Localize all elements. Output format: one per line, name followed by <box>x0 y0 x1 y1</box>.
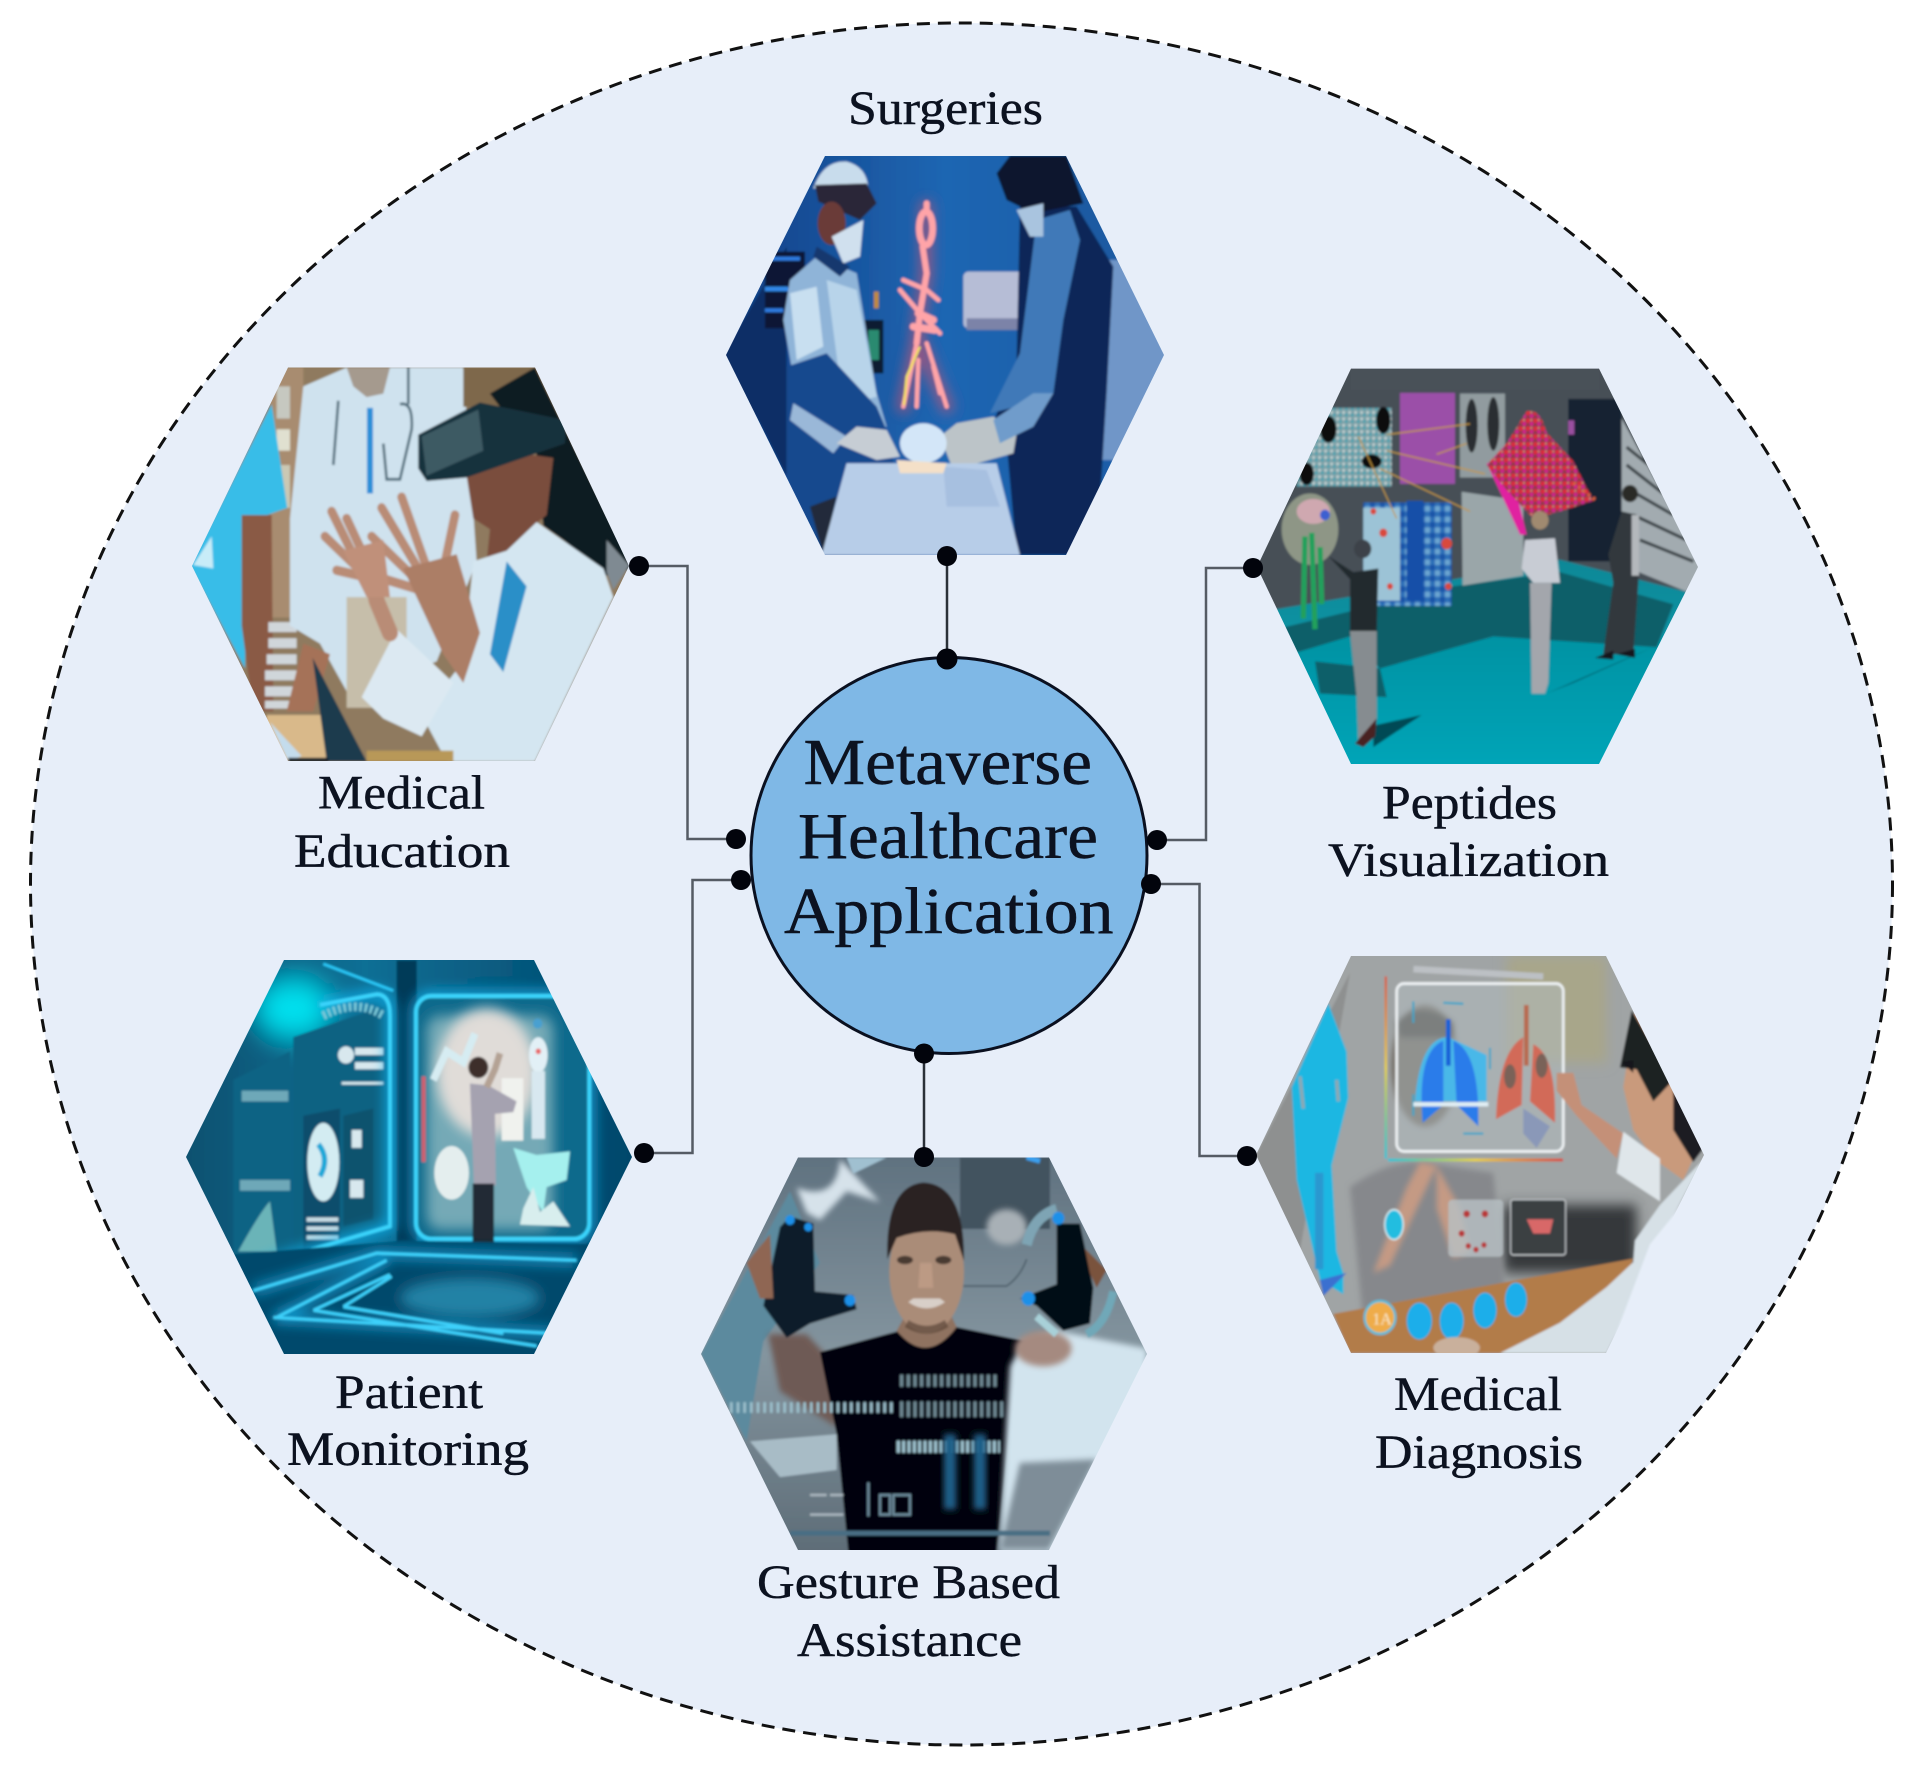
label: Patient Monitoring <box>287 1366 529 1476</box>
label: Medical Education <box>294 766 510 878</box>
label: Peptides Visualization: Peptides <box>1382 776 1557 830</box>
hexagon image: patient monitoring hologram room <box>183 955 637 1359</box>
hexagon image: peptides visualization room <box>1253 365 1703 769</box>
connector: patient monitoring to centre <box>644 880 741 1153</box>
hexagon image: medical diagnosis with lungs <box>1253 951 1710 1359</box>
label: Peptides Visualization <box>1328 776 1609 887</box>
centre title: Healthcare <box>798 800 1098 873</box>
centre title: Metaverse <box>804 726 1092 799</box>
connector: medical diagnosis to centre <box>1151 884 1247 1156</box>
label: Medical Education: Education <box>294 825 510 878</box>
connector end dots <box>629 546 1263 1167</box>
hexagon image: medical diagnosis with lungs: 1A <box>1372 1309 1392 1329</box>
connector: surgeries to centre <box>946 556 948 659</box>
label: Peptides Visualization: Visualization <box>1328 834 1609 887</box>
hexagon image: doctor wearing VR headset <box>187 361 633 769</box>
label: Gesture Based Assistance <box>757 1556 1060 1667</box>
connector: medical education to centre <box>639 566 736 839</box>
connector: gesture based assistance to centre <box>923 1053 925 1157</box>
label: Gesture Based Assistance: Gesture Based <box>757 1556 1060 1609</box>
label: Patient Monitoring: Patient <box>335 1366 484 1419</box>
label: Medical Diagnosis <box>1375 1368 1583 1479</box>
central circle: hub <box>751 658 1147 1054</box>
hexagon image: surgeons with holographic vessels <box>720 150 1177 560</box>
label: Medical Diagnosis: Diagnosis <box>1375 1426 1583 1479</box>
label: Medical Education: Medical <box>318 766 485 820</box>
centre title <box>784 726 1114 948</box>
label: Surgeries: Surgeries <box>848 82 1043 135</box>
hexagon image: gesture based assistance <box>693 1152 1153 1556</box>
label: Gesture Based Assistance: Assistance <box>797 1614 1022 1667</box>
centre title: Application <box>784 875 1114 948</box>
connector: peptides visualization to centre <box>1157 568 1253 840</box>
label: Medical Diagnosis: Medical <box>1394 1368 1562 1421</box>
label: Patient Monitoring: Monitoring <box>287 1423 529 1476</box>
